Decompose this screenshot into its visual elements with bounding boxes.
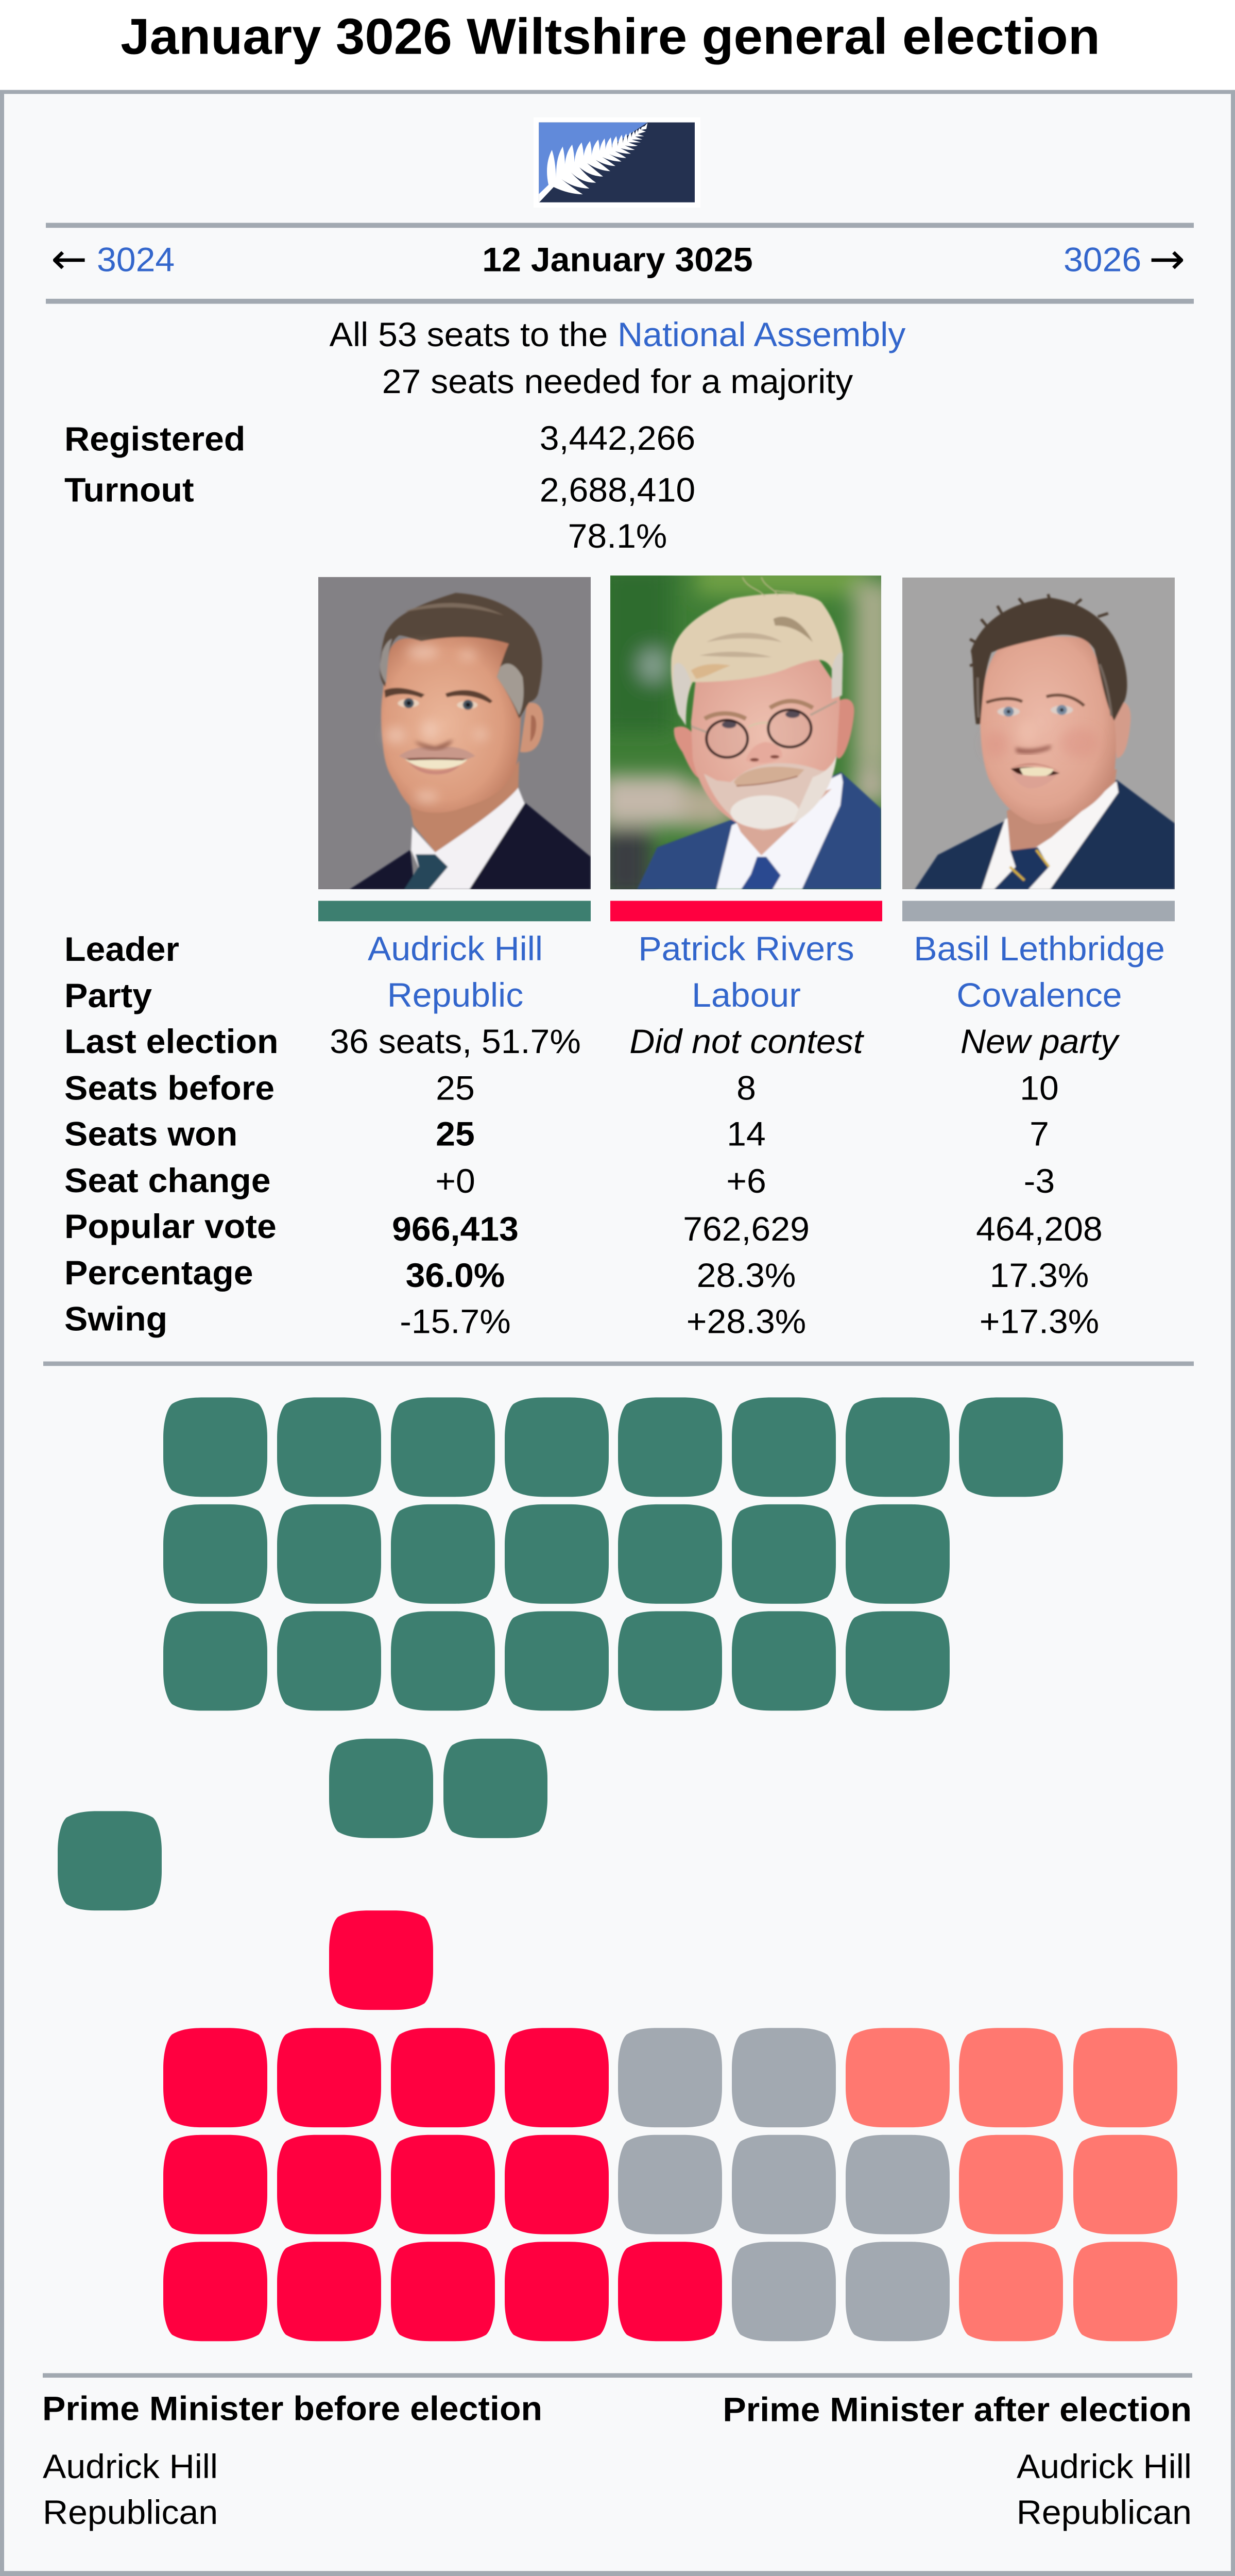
column: Labour: +6	[726, 1162, 766, 1200]
prime minister after election: Prime Minister after election	[723, 2391, 1192, 2429]
portrait: Basil Lethbridge	[902, 578, 1175, 889]
turnout stats: Registered	[64, 420, 245, 458]
column: Republic: 36 seats, 51.7%	[330, 1023, 581, 1061]
prime minister before election	[42, 2389, 542, 2532]
previous election link: 3024	[97, 241, 175, 279]
column: Labour: 28.3%	[697, 1257, 796, 1295]
seat: speaker	[58, 1811, 162, 1910]
column: Labour: +28.3%	[687, 1302, 806, 1341]
seat: centre red	[329, 1910, 433, 2010]
column: Labour: Patrick Rivers	[638, 930, 854, 968]
column: Labour: 762,629	[683, 1210, 810, 1248]
party colour bars	[318, 901, 1175, 921]
column: Covalence: -3	[1024, 1162, 1055, 1200]
prime minister before election: Republican	[43, 2494, 218, 2532]
row labels: Seats won	[64, 1115, 237, 1153]
column: Covalence: 17.3%	[990, 1257, 1089, 1295]
row labels: Party	[64, 977, 152, 1015]
portrait: Audrick Hill	[318, 577, 591, 889]
candidate portraits	[318, 562, 1175, 899]
row labels: Last election	[64, 1023, 279, 1061]
column: Covalence: 464,208	[976, 1210, 1103, 1248]
prime minister after election	[723, 2391, 1192, 2532]
portrait: Patrick Rivers	[610, 575, 881, 889]
column: Covalence: +17.3%	[980, 1302, 1099, 1341]
results table	[64, 930, 1165, 1341]
column: Labour: Did not contest	[629, 1023, 864, 1061]
title: January 3026 Wiltshire general election	[121, 8, 1100, 65]
row labels	[64, 930, 279, 1338]
row labels: Leader	[64, 930, 179, 969]
column: Covalence: 7	[1030, 1115, 1049, 1153]
seats: opposition red block	[163, 2028, 722, 2341]
column: Republic: -15.7%	[400, 1302, 511, 1341]
column: Republic: Audrick Hill	[368, 930, 543, 968]
column: Covalence: 10	[1020, 1069, 1059, 1107]
navigation header	[46, 223, 1194, 304]
column: Republic: Republic	[387, 976, 523, 1014]
column: Labour: 14	[727, 1115, 766, 1153]
seats: opposition grey block	[618, 2028, 950, 2341]
turnout stats: Turnout	[64, 471, 194, 509]
prime minister after election: Republican	[1017, 2494, 1192, 2532]
column: Labour: Labour	[692, 976, 801, 1014]
column: Republic: +0	[435, 1162, 475, 1200]
next election arrow: →	[1149, 234, 1185, 283]
row labels: Seat change	[64, 1162, 271, 1200]
seating chart	[58, 1397, 1177, 2341]
turnout stats	[64, 419, 695, 555]
column: Republic: 25	[436, 1069, 475, 1107]
next election link: 3026	[1064, 241, 1141, 279]
row labels: Swing	[64, 1300, 167, 1338]
prime minister before election: Audrick Hill	[43, 2448, 218, 2486]
seats summary: All 53 seats to the National Assembly	[330, 316, 906, 354]
turnout stats: 3,442,266	[540, 419, 695, 457]
column: Covalence	[914, 930, 1165, 1341]
column: Covalence: Basil Lethbridge	[914, 930, 1165, 968]
seats summary	[330, 316, 906, 401]
column: Labour	[629, 930, 864, 1341]
seats: government block	[163, 1397, 1063, 1710]
column: Republic	[330, 930, 581, 1341]
turnout stats: 2,688,410	[540, 471, 695, 509]
column: Republic: 966,413	[392, 1210, 519, 1248]
prime minister after election: Audrick Hill	[1017, 2448, 1192, 2486]
previous election arrow: ←	[51, 234, 87, 283]
seats summary: 27 seats needed for a majority	[382, 363, 853, 401]
row labels: Percentage	[64, 1254, 253, 1292]
column: Covalence: New party	[960, 1023, 1120, 1061]
column: Covalence: Covalence	[956, 976, 1122, 1014]
seats: centre green pair	[329, 1739, 547, 1838]
row labels: Popular vote	[64, 1208, 277, 1246]
column: Republic: 25	[436, 1115, 475, 1153]
prime minister before election: Prime Minister before election	[42, 2389, 542, 2428]
icon: silver fern flag	[534, 117, 700, 208]
turnout stats: 78.1%	[568, 517, 667, 555]
seats: opposition salmon block	[846, 2028, 1177, 2341]
column: Republic: 36.0%	[406, 1257, 505, 1295]
column: Labour: 8	[736, 1069, 756, 1107]
election date: 12 January 3025	[482, 241, 753, 279]
row labels: Seats before	[64, 1069, 275, 1107]
